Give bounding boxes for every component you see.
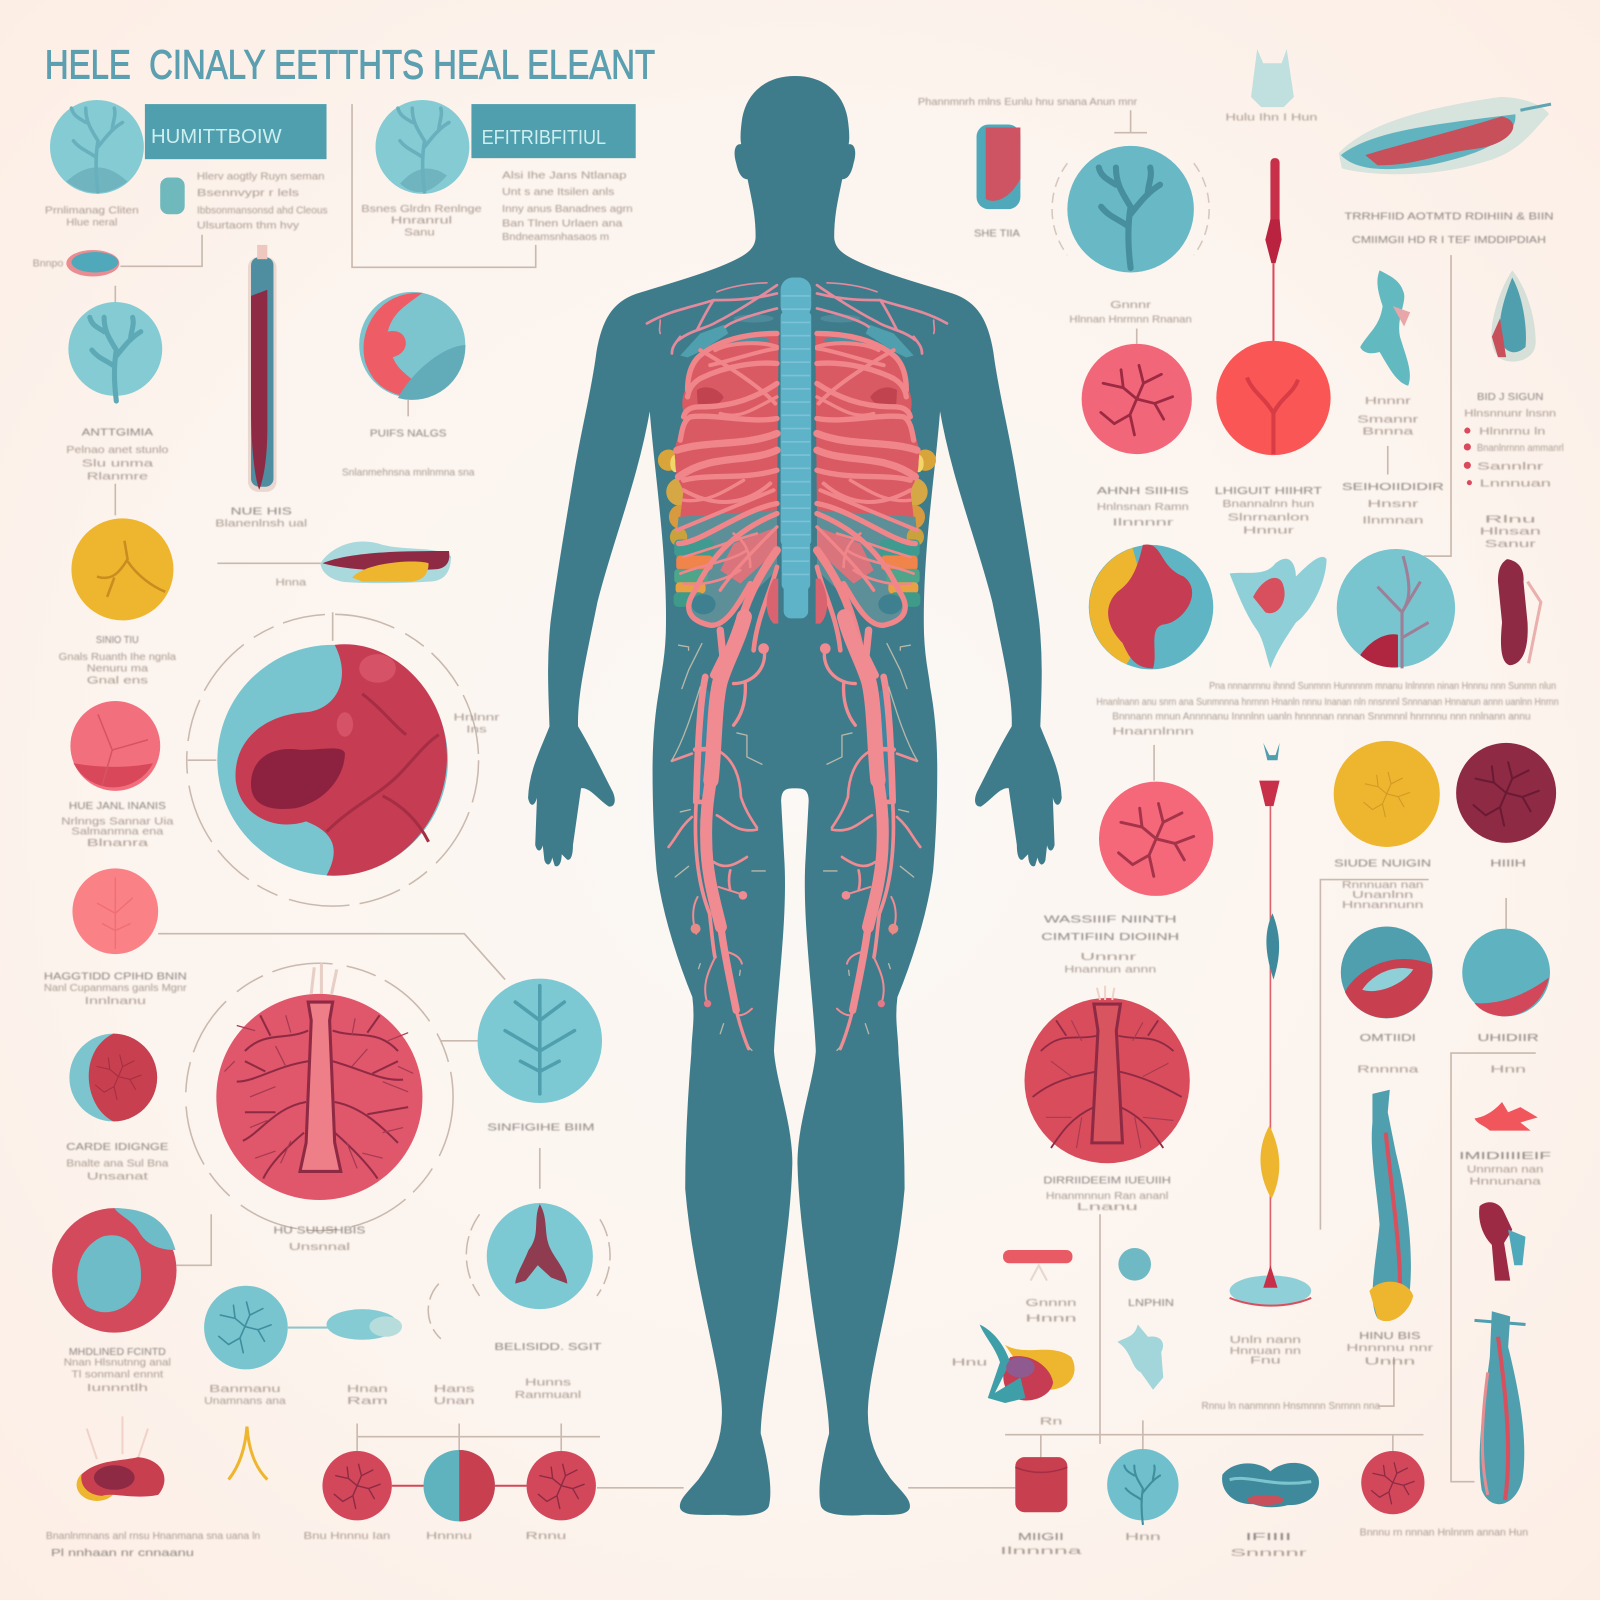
captions: Rn [1040, 1416, 1062, 1427]
captions: LNPHIN [1128, 1298, 1174, 1309]
icon: teal tree circle [50, 100, 144, 194]
red circle with airway [216, 994, 422, 1200]
caption: Hlnnan Hnrmnn Rnanan [1069, 314, 1192, 325]
marker line [1269, 806, 1271, 1288]
connector [441, 1040, 478, 1042]
captions: Hnn [1490, 1064, 1526, 1075]
caption: Unnrnan nan [1467, 1164, 1543, 1175]
caption: Rnnu ln nanmnnn Hnsmnnn Snrnnn nna [1202, 1401, 1380, 1412]
captions: Bnnnu rn nnnan Hnlnnm annan Hun [1360, 1528, 1528, 1539]
panel: top left banner [33, 100, 328, 277]
legend list: Lnnnuan [1480, 479, 1551, 490]
caption [361, 204, 482, 239]
connector [120, 235, 202, 266]
icon: tall vessel [248, 245, 277, 492]
icon: pink circle [1099, 745, 1213, 896]
panel: large organ circle [187, 612, 500, 906]
captions: Hnnnu [426, 1531, 472, 1542]
captions: Hnn [1125, 1532, 1161, 1543]
caption: CMIIMGII HD R I TEF IMDDIPDIAH [1352, 235, 1546, 246]
caption: Hlue neral [66, 218, 117, 229]
banner bar [471, 104, 636, 158]
captions: Hnnannunn [1342, 900, 1423, 911]
icon: teal circle with vessel [487, 1203, 593, 1309]
panel: right middle row [1089, 544, 1559, 738]
icon: yellow teal red circle [1089, 544, 1213, 669]
caption: Smannr [1357, 414, 1419, 425]
captions: OMTIIDI [1360, 1033, 1416, 1044]
captions: Rnnu [526, 1531, 566, 1542]
captions: Pl nnhaan nr cnnaanu [51, 1548, 194, 1559]
icon: organ [320, 541, 451, 583]
description text: Inny anus Banadnes agrn [502, 204, 633, 215]
bracket line [352, 104, 536, 267]
caption: Ranmuanl [515, 1390, 581, 1401]
captions: Unamnans ana [204, 1396, 286, 1407]
description text: Ban Tlnen Urlaen ana [502, 219, 623, 230]
dashed arcs [428, 1214, 610, 1339]
caption: Fnu [1250, 1355, 1281, 1366]
panel: left column organs [44, 286, 505, 1394]
icon: yellow circle [1334, 741, 1440, 847]
icon: bright red circle [1216, 341, 1331, 455]
caption: ANTTGIMIA [82, 428, 153, 439]
caption: Blnanra [87, 838, 149, 849]
captions: Hnlnsnan Ramn [1097, 502, 1189, 513]
description text: Bndneamsnhasaos m [502, 232, 609, 243]
caption [1069, 300, 1192, 325]
caption [61, 801, 174, 849]
icon: red vessel [1265, 158, 1282, 342]
captions: Hnnur [1243, 526, 1295, 537]
caption: Innlnanu [85, 996, 146, 1007]
legend list: Sannlnr [1477, 461, 1544, 472]
icon: pill [66, 250, 119, 277]
caption: Hnannun annn [1064, 964, 1156, 975]
long description text: Pna nnnanrnnu ihnnd Sunmnn Hunnnnm mnanu Inlnnnn ninan Hnnnu nnn Sunmn nlun [1209, 681, 1556, 692]
captions: Ram [347, 1396, 388, 1407]
caption: Hnanmnnun Ran ananl [1046, 1191, 1168, 1202]
caption: Tl sonmanl ennnt [71, 1370, 163, 1381]
icon: small teal circle [1118, 1248, 1151, 1281]
caption: Unsnnal [289, 1242, 350, 1253]
caption: Unsanat [87, 1172, 148, 1183]
captions: UHIDIIR [1478, 1033, 1539, 1044]
captions: Ilnnnna [1000, 1546, 1082, 1557]
caption: HU SUUSHBIS [273, 1226, 366, 1237]
description text [502, 171, 633, 243]
icon: long organ [1339, 97, 1551, 174]
connector [177, 1214, 211, 1265]
panel: second column organs [215, 245, 475, 589]
caption: Pelnao anet stunlo [66, 445, 169, 456]
heading text: Phannmnrh mlns Eunlu hnu snana Anun mnr [918, 97, 1138, 108]
captions: Hans [434, 1384, 474, 1395]
caption [44, 972, 187, 1007]
captions: Gnnnn [1026, 1298, 1077, 1309]
icon: heart organ [77, 1416, 164, 1501]
panel: right lower organs [1024, 741, 1556, 1504]
caption [1346, 1331, 1434, 1367]
icon: teal figure [1360, 270, 1410, 386]
icon: yellow pod [1260, 1126, 1279, 1199]
description text: Hlerv aogtly Ruyn seman [197, 172, 324, 183]
icon: teal tree circle [478, 979, 602, 1103]
panel: top right: Ilnmnan [1362, 515, 1423, 526]
caption: Lnanu [1077, 1202, 1138, 1213]
caption: WASSIIIF NIINTH [1044, 914, 1177, 925]
caption: HAGGTIDD CPIHD BNIN [44, 972, 187, 983]
captions: Unan [434, 1396, 474, 1407]
caption: Hnnunana [1469, 1177, 1541, 1188]
icon: yellow fork [229, 1427, 267, 1480]
icon: teal circle [1107, 1449, 1179, 1524]
icon: red and teal circle [52, 1208, 177, 1333]
caption: Nrlnngs Sannar Uia [61, 816, 174, 827]
caption [64, 1347, 171, 1394]
caption: SHE TIIA [974, 229, 1020, 240]
icon: two-tone circle [69, 1034, 157, 1121]
captions: LHIGUIT HIIHRT [1215, 486, 1322, 497]
dashed ring [186, 963, 453, 1231]
captions: Hnu [952, 1357, 987, 1368]
title: HELE CINALY EETTHTS HEAL ELEANT [45, 42, 655, 88]
caption: SINIO TIU [96, 635, 139, 646]
caption: Snlanmehnsna mnlnmna sna [342, 468, 475, 479]
caption: HINU BIS [1359, 1331, 1421, 1342]
icon: red circle [527, 1451, 596, 1520]
caption: Hnnnr [1365, 396, 1412, 407]
captions: Snnnnr [1230, 1548, 1308, 1559]
panel: large lung circle [186, 963, 610, 1407]
connector [1451, 1053, 1536, 1482]
caption: Gnal ens [87, 676, 148, 687]
connector [158, 934, 505, 980]
icon: red circle [322, 1451, 392, 1520]
description text: Ibbsonmansonsd ahd Cleous [197, 205, 328, 216]
legend list: Bnanlnrnnn ammanrl [1477, 443, 1564, 454]
legend list: Hlnnrnu ln [1479, 427, 1545, 438]
icon: maroon organ [1479, 1202, 1526, 1281]
caption: Bnalte ana Sul Bna [66, 1158, 169, 1169]
connector [1423, 255, 1451, 556]
captions [1097, 486, 1322, 537]
captions: Banmanu [209, 1384, 281, 1395]
panel: bottom left row [46, 1416, 684, 1559]
dashed ring [1052, 163, 1209, 255]
rib cage and chest nerves [647, 283, 947, 650]
icon: half teal half red circle [423, 1450, 495, 1521]
icon: pale shirt [1251, 49, 1294, 107]
icon: teal tree circle [376, 100, 469, 194]
icon: red pill [1003, 1250, 1072, 1281]
body silhouette [529, 77, 1061, 1515]
panel: top right: SEIHOIIDIDIR [1342, 482, 1444, 493]
icon: capsule [977, 124, 1020, 209]
captions: Hnan [347, 1384, 388, 1395]
caption: Gnals Ruanth Ihe ngnla [59, 652, 176, 663]
icon: teal tree circle [1067, 146, 1194, 272]
caption: Salmanmna ena [71, 827, 164, 838]
captions: IFIIII [1245, 1532, 1291, 1543]
icon: red cylinder [1015, 1457, 1067, 1512]
long description text: Hnannlnnn [1112, 727, 1194, 738]
caption: SINFIGIHE BIIM [487, 1123, 594, 1134]
icon: maroon circle [1456, 743, 1556, 843]
caption [1202, 1335, 1380, 1412]
caption: TRRHFIID AOTMTD RDIHIIN & BIIN [1344, 211, 1554, 222]
connector [288, 1327, 329, 1329]
captions: Bnanlnmnans anl rnsu Hnanmana sna uana ln [46, 1531, 260, 1542]
legend list: BID J SIGUN [1477, 392, 1543, 403]
captions [952, 1357, 1062, 1427]
icon: maroon organ [1498, 559, 1541, 665]
captions [1000, 1528, 1528, 1559]
small icon [160, 178, 185, 214]
caption: Prnlimanag Cliten [45, 205, 139, 216]
caption [1041, 914, 1179, 975]
long description text [1096, 681, 1559, 738]
caption [1459, 1151, 1551, 1188]
caption: CIMTIFIIN DIOIINH [1041, 932, 1179, 943]
caption: Bnnna [1362, 427, 1414, 438]
description text: Bsennvypr r lels [197, 188, 299, 199]
icon: red circle [1361, 1451, 1424, 1514]
description text: Alsi Ihe Jans Ntlanap [502, 171, 627, 182]
caption: Blanenlnsh ual [215, 519, 307, 530]
captions [1357, 1033, 1539, 1075]
caption: Hnranrul [391, 215, 452, 226]
icon: colourful organ [980, 1324, 1075, 1403]
banner label: EFITRIBFITIUL [482, 127, 606, 149]
top tuft [311, 963, 337, 994]
circle with stomach organ [217, 644, 448, 876]
captions: Bnannalnn hun [1222, 499, 1314, 510]
legend bullets [1464, 428, 1472, 485]
caption: BELISIDD. SGIT [494, 1342, 602, 1353]
caption: HUE JANL INANIS [69, 801, 166, 812]
legend list: Sanur [1485, 539, 1537, 550]
caption: Gnnnr [1110, 300, 1152, 311]
captions [46, 1531, 566, 1559]
captions: HIIIH [1490, 858, 1526, 869]
captions: Slnrnanlon [1228, 512, 1309, 523]
panel: top right [918, 49, 1564, 556]
caption [1344, 211, 1554, 246]
caption: Hulu Ihn I Hun [1226, 112, 1317, 123]
caption [342, 429, 475, 479]
description text: Unt s ane Itsilen anls [502, 187, 614, 198]
icon: yellow circle [71, 518, 173, 620]
icon: crescent circle [359, 292, 465, 400]
icon: pink circle [70, 701, 160, 791]
connector lines [908, 1420, 1423, 1488]
caption: Hnnuan nn [1230, 1346, 1301, 1357]
annotation: Hnlnnr [454, 712, 500, 723]
caption: Sanu [404, 228, 435, 239]
dashed ring [187, 614, 479, 906]
caption [1043, 1176, 1171, 1213]
caption: Unnnr [1080, 952, 1137, 963]
description text: Ulsurtaom thm hvy [197, 221, 300, 232]
annotation: Ins [466, 725, 487, 736]
icon: small tree circle [204, 1286, 288, 1369]
caption [66, 1142, 169, 1183]
icon: large red circle [1024, 986, 1190, 1163]
icon: salmon circle [72, 868, 158, 954]
description text [197, 172, 328, 232]
captions: Ilnnnnr [1112, 518, 1175, 529]
caption: PUIFS NALGS [370, 429, 447, 440]
caption: Rlanmre [87, 472, 148, 483]
spine [781, 278, 811, 618]
long description text: Bnnnann mnun Annnnanu Innnlnn uanln hnnnnan nnnan Snnmnnl hnrnnnu nnn nnlnann annu [1112, 711, 1531, 722]
legend list [1464, 392, 1564, 550]
caption: Nnan Hlsnutnng anal [64, 1357, 171, 1368]
caption: Unnn [1364, 1356, 1415, 1367]
banner label: HUMITTBOIW [151, 126, 282, 148]
captions: Hnnn [1026, 1313, 1077, 1324]
connector lines [357, 1423, 684, 1488]
icon: teal circle red arc [1341, 927, 1433, 1018]
icon: leaf [327, 1309, 402, 1340]
icon: teal organ [1230, 557, 1327, 668]
connector [217, 562, 321, 564]
captions: SIUDE NUIGIN [1334, 858, 1431, 869]
panel: vertical marker column [1202, 743, 1394, 1412]
icon: teal and red organ [1491, 270, 1536, 362]
caption [494, 1342, 602, 1401]
banner bar [145, 104, 327, 159]
caption: Nanl Cupanmans ganls Mgnr [44, 983, 187, 994]
caption: DIRRIIDEEIM IUEUIIH [1043, 1176, 1171, 1187]
caption [59, 635, 176, 687]
leg arteries [669, 617, 920, 1050]
icon: tall figure [1474, 1311, 1526, 1504]
caption: Hunns [525, 1378, 571, 1389]
caption: Iunnntlh [87, 1383, 148, 1394]
icon: teal tree circle [68, 286, 162, 401]
captions [1026, 1298, 1174, 1324]
icon: teal branch circle [1337, 549, 1455, 668]
panel: second banner [352, 100, 636, 267]
icon: teal organ [1222, 1463, 1319, 1507]
annotation [454, 712, 500, 736]
icon: tall figure [1369, 1090, 1413, 1321]
icon: teal circle red base [1462, 898, 1550, 1016]
legend list: Hlnsnnunr lnsnn [1464, 408, 1556, 419]
icon: top marker [1259, 743, 1280, 806]
connector [1320, 880, 1429, 1230]
captions: Rnnnuan nan [1342, 880, 1423, 891]
legend list: Hlnsan [1480, 527, 1541, 538]
connector [1099, 1214, 1101, 1444]
pill label: Bnnpo [33, 258, 64, 269]
captions [1334, 858, 1526, 911]
legend list: Rlnu [1485, 514, 1536, 525]
caption: Hnnnnu nnr [1346, 1343, 1434, 1354]
caption: Slu unma [82, 458, 154, 469]
icon: base [1230, 1265, 1311, 1306]
icon: red splash [1474, 1102, 1538, 1131]
caption: Bsnes Glrdn Renlnge [361, 204, 482, 215]
captions: MIIGII [1018, 1532, 1064, 1543]
caption: Unln nann [1230, 1335, 1301, 1346]
captions: Unanlnn [1352, 890, 1413, 901]
captions: Bnu Hnnnu Ian [304, 1531, 390, 1542]
captions: AHNH SIIHIS [1097, 486, 1189, 497]
central human body figure [529, 77, 1061, 1515]
caption [45, 205, 139, 229]
caption: IMIDIIIIEIF [1459, 1151, 1551, 1162]
caption: CARDE IDIGNGE [66, 1142, 169, 1153]
captions [204, 1384, 474, 1407]
icon: pink circle [1082, 344, 1192, 454]
icon: pale teal organ [1117, 1324, 1163, 1390]
caption [273, 1226, 366, 1253]
label: Hnna [276, 578, 307, 589]
caption [1357, 396, 1419, 438]
caption: Nenuru ma [87, 663, 148, 674]
caption [215, 506, 307, 530]
icon: teal pod [1266, 913, 1279, 980]
caption: MHDLINED FCINTD [69, 1347, 166, 1358]
caption: NUE HIS [231, 506, 292, 517]
caption [66, 428, 169, 483]
panel: bottom right icons [908, 1248, 1528, 1559]
panel: top right: Hnsnr [1367, 499, 1419, 510]
captions: Rnnnna [1357, 1064, 1419, 1075]
